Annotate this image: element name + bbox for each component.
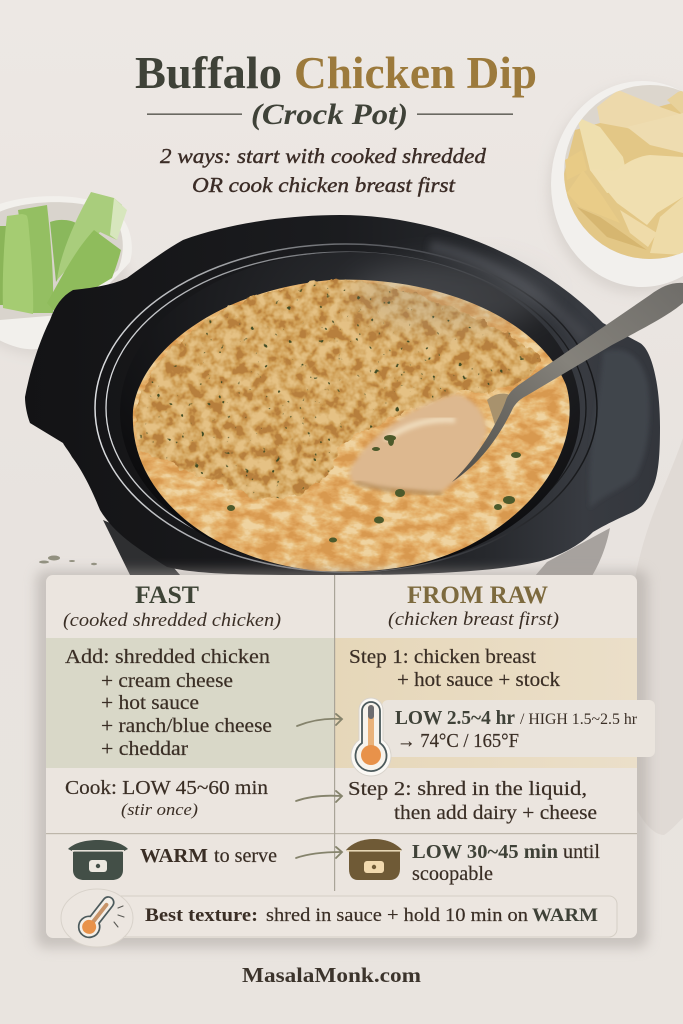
from raw column heading: FROM RAW [407,582,548,609]
from raw column heading: (chicken breast first) [388,609,559,630]
scooped chicken [350,394,487,493]
fast ingredients list: Add: shredded chicken [65,647,270,668]
bowl of celery sticks [0,192,132,356]
step 1 text: Step 1: chicken breast [349,647,537,668]
low finish text: scoopable [412,864,493,885]
step 2 text [348,779,597,824]
fast column heading [63,582,281,631]
temperature callout [382,700,655,757]
fast ingredients list: + cheddar [101,739,189,760]
best texture tip bar [110,896,617,937]
arrow: cook to step 2 [296,791,342,802]
fast ingredients list: + hot sauce [101,693,199,714]
crumb topping [134,280,538,498]
cook time text: (stir once) [121,800,198,819]
step 1 text [349,647,560,691]
celery sticks [0,192,127,314]
cook time text: Cook: LOW 45~60 min [65,778,268,799]
icon: brown slow cooker [346,839,402,880]
rim bands [95,244,597,572]
herbs on dip [227,435,521,542]
steam on the rim [350,259,550,331]
slate sheen on the top right rim [430,246,585,338]
icon: thermometer badge [61,889,133,947]
towel [632,438,683,835]
dip [133,280,570,572]
slow cooker [25,215,683,576]
comparison panel [46,575,655,947]
right handle sheen [589,350,649,508]
bowl of tortilla chips [548,81,683,294]
best texture tip bar: shred in sauce + hold 10 min on [266,906,528,926]
crock well [120,252,580,572]
step 2 text: then add dairy + cheese [394,803,597,824]
temperature callout: LOW 2.5~4 hr [395,708,515,729]
title [135,47,537,98]
best texture tip bar: Best texture: [145,905,258,926]
temperature callout: / HIGH 1.5~2.5 hr [520,711,638,728]
temperature callout: → 74°C / 165°F [397,731,519,752]
pot rim with handles [25,215,660,575]
warm to serve: to serve [214,846,277,867]
intro text: OR cook chicken breast first [192,173,456,197]
subtitle: crock pot: (Crock Pot) [251,98,408,131]
arrow: ingredients to step 1 [297,714,342,726]
low finish text: until [563,842,601,863]
icon: thermometer [351,698,391,776]
fast column heading: (cooked shredded chicken) [63,610,281,631]
sauce film behind spoon [487,394,512,425]
fast column heading: FAST [135,582,199,609]
intro text: 2 ways: start with cooked shredded [160,144,487,168]
footer website: MasalaMonk.com [242,963,422,987]
best texture tip bar: WARM [532,905,598,926]
cook time text [65,778,268,819]
low finish text: LOW 30~45 min [412,842,558,863]
warm to serve: WARM [140,846,208,867]
title: Chicken Dip [294,47,537,98]
herb specks on the counter [39,556,97,565]
low finish text [412,842,601,885]
pot base [103,520,180,575]
fast ingredients list [65,647,272,760]
from raw column heading [388,582,559,630]
fast ingredients list: + cream cheese [101,671,233,692]
step 1 text: + hot sauce + stock [397,670,560,691]
fast ingredients list: + ranch/blue cheese [101,716,272,737]
title: Buffalo [135,47,282,98]
step 2 text: Step 2: shred in the liquid, [348,779,587,800]
intro text [160,144,487,197]
spoon [452,283,683,482]
icon: green slow cooker [68,840,128,880]
table shadow [36,570,648,948]
arrow: warm to low [296,847,342,858]
warm to serve [140,846,277,867]
